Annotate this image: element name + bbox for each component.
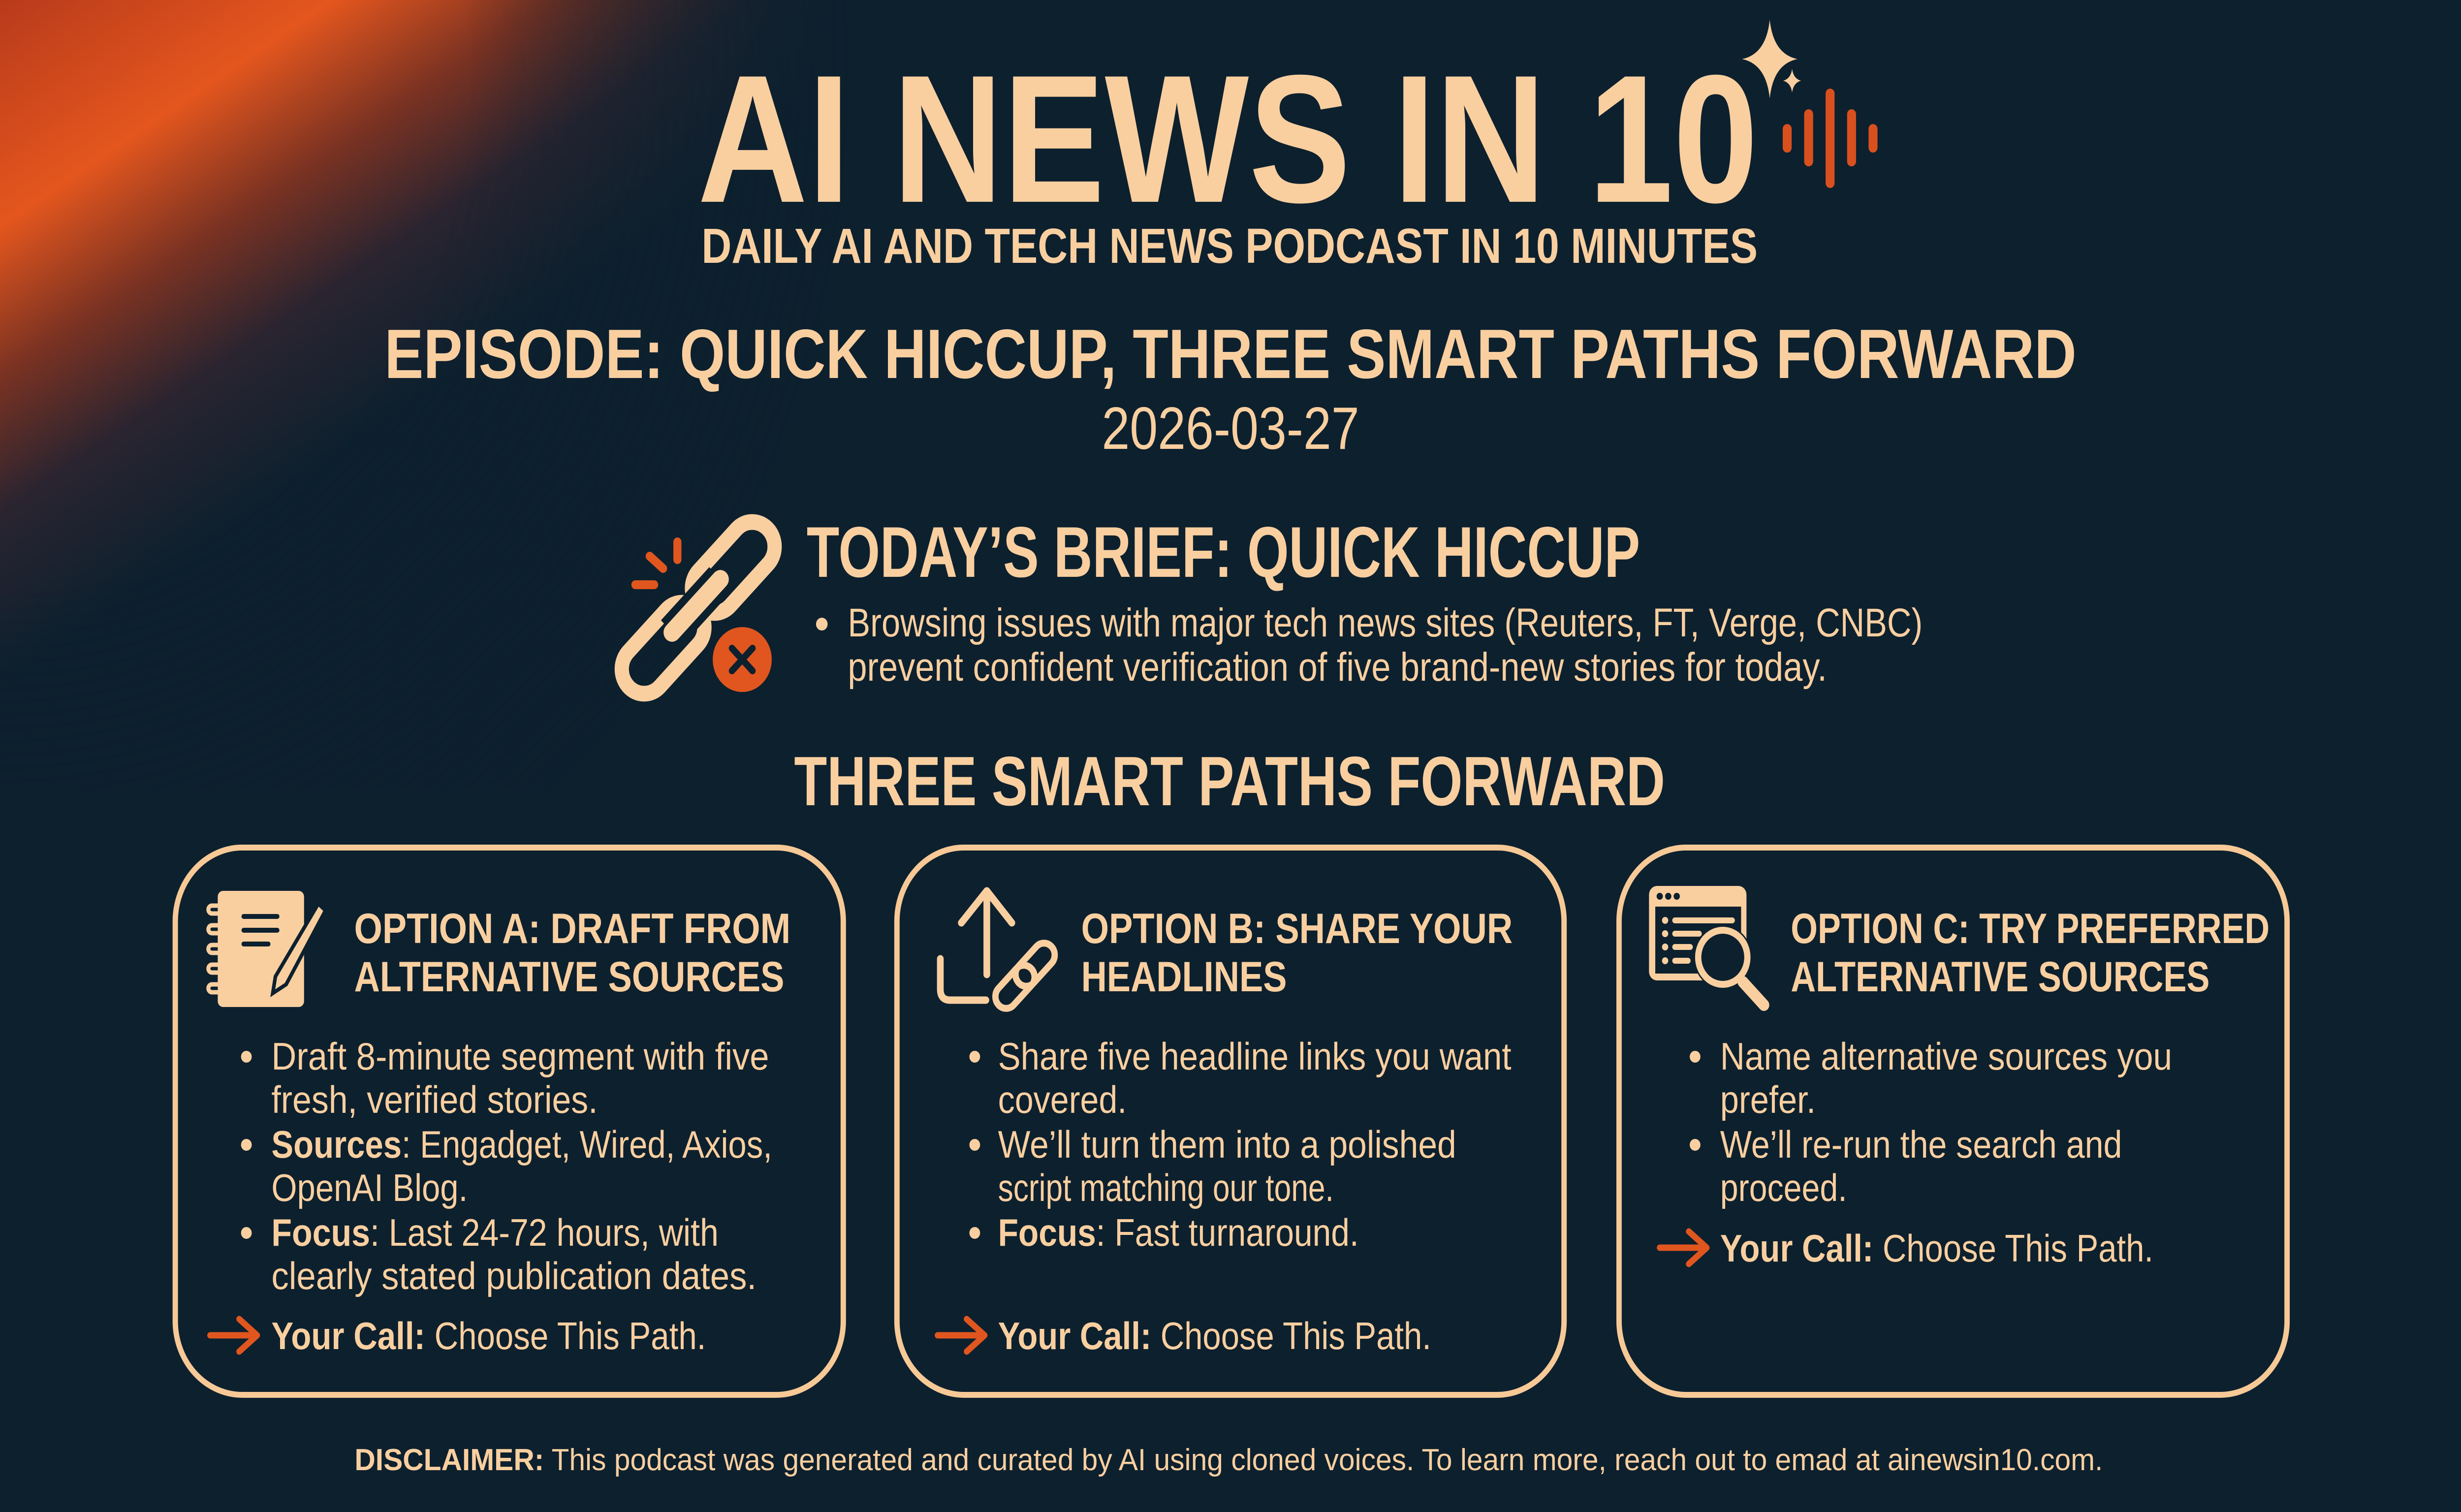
panel: option C — [1619, 848, 2287, 1395]
icon: broken link — [612, 512, 784, 704]
background — [0, 0, 745, 631]
date: 2026-03-27 — [1102, 394, 1359, 462]
brief text: prevent confident verification of five brand-new stories for today. — [848, 644, 1827, 690]
call to action C: Your Call: Choose This Path. — [1720, 1227, 2153, 1270]
bullets C — [1690, 1035, 2172, 1209]
brief text: Browsing issues with major tech news sites (Reuters, FT, Verge, CNBC) — [848, 600, 1923, 645]
disclaimer: DISCLAIMER: This podcast was generated and curated by AI using cloned voices. To learn more, reach out to emad at ainewsin10.com. — [354, 1442, 2103, 1477]
call to action A: Your Call: Choose This Path. — [271, 1315, 706, 1357]
bullets A: fresh, verified stories. — [271, 1078, 598, 1121]
heading A: OPTION A: DRAFT FROM — [354, 906, 790, 952]
bullets A: Sources: Engadget, Wired, Axios, — [271, 1123, 772, 1166]
heading A — [354, 906, 790, 1001]
panel: option A — [175, 848, 843, 1395]
panel: option B — [897, 848, 1564, 1395]
bullets B: We’ll turn them into a polished — [998, 1123, 1456, 1166]
heading A: ALTERNATIVE SOURCES — [354, 954, 784, 1001]
bullets B: Share five headline links you want — [998, 1035, 1512, 1078]
bullets A: Focus: Last 24-72 hours, with — [271, 1211, 719, 1254]
title: AI NEWS IN 10 — [697, 37, 1758, 241]
bullets B: script matching our tone. — [998, 1166, 1334, 1209]
episode title: EPISODE: QUICK HICCUP, THREE SMART PATHS FORWARD — [384, 315, 2077, 393]
bullets C: prefer. — [1720, 1078, 1816, 1121]
bullets C: Name alternative sources you — [1720, 1035, 2172, 1078]
heading C — [1791, 906, 2270, 1001]
heading B: OPTION B: SHARE YOUR — [1081, 906, 1513, 952]
heading C: OPTION C: TRY PREFERRED — [1791, 906, 2270, 952]
subtitle: DAILY AI AND TECH NEWS PODCAST IN 10 MINUTES — [701, 219, 1758, 274]
call to action B: Your Call: Choose This Path. — [998, 1315, 1431, 1357]
heading B — [1081, 906, 1513, 1001]
bullets A: clearly stated publication dates. — [271, 1255, 757, 1297]
heading B: HEADLINES — [1081, 954, 1287, 1001]
bullets A — [241, 1035, 772, 1297]
icon: sparkle and sound wave — [1742, 20, 1873, 183]
heading: three smart paths forward: THREE SMART PATHS FORWARD — [794, 742, 1665, 820]
bullets B: Focus: Fast turnaround. — [998, 1211, 1359, 1254]
icon: notepad and pencil — [208, 891, 325, 1007]
heading C: ALTERNATIVE SOURCES — [1791, 954, 2209, 1001]
brief text — [816, 600, 1923, 690]
icon: browser and magnifier — [1649, 886, 1764, 1005]
icon: upload and link — [940, 891, 1059, 1013]
bullets B: covered. — [998, 1078, 1127, 1121]
bullets A: Draft 8-minute segment with five — [271, 1035, 769, 1078]
bullets A: OpenAI Blog. — [271, 1166, 468, 1209]
bullets B — [969, 1035, 1512, 1254]
heading: today's brief: TODAY’S BRIEF: QUICK HICCUP — [807, 512, 1640, 592]
bullets C: proceed. — [1720, 1166, 1847, 1209]
bullets C: We’ll re-run the search and — [1720, 1123, 2122, 1166]
